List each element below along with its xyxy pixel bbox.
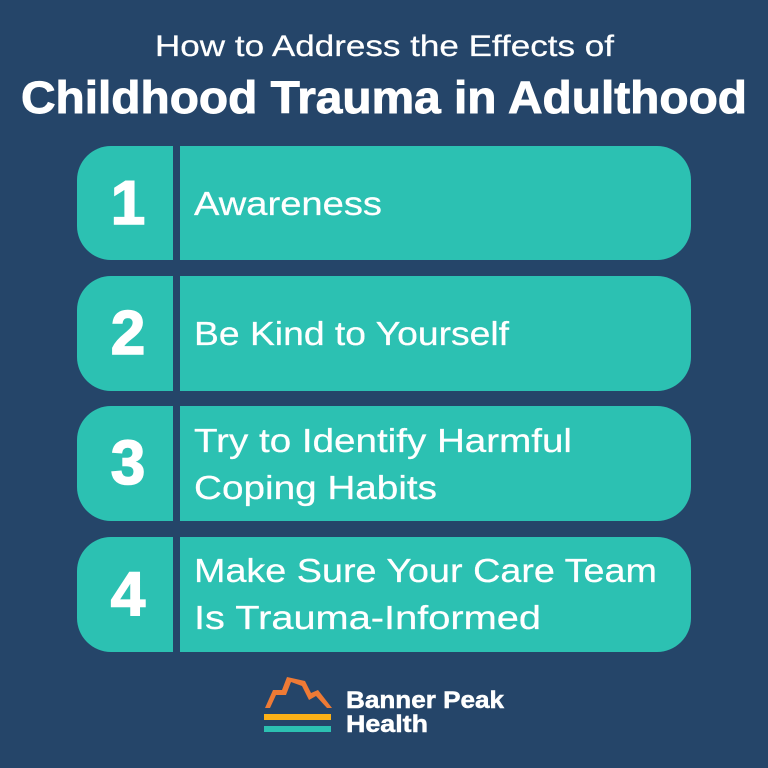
step 1 label: Awareness (194, 185, 382, 222)
step 3 number: 3 (111, 429, 145, 498)
panel: step 4 (77, 537, 691, 652)
step 4 label (194, 552, 657, 636)
logo wordmark: Health (346, 711, 428, 738)
title (21, 30, 747, 123)
step 2 number: 2 (111, 299, 145, 368)
logo wordmark (346, 687, 505, 738)
panel: step 1 (77, 146, 691, 260)
step 4 label: Make Sure Your Care Team (194, 552, 657, 589)
step 3 label: Coping Habits (194, 469, 437, 506)
step 4 number: 4 (111, 560, 146, 629)
panel: step 3 (77, 406, 691, 521)
panel: step 2 (77, 276, 691, 391)
icon: teal bar (264, 726, 331, 732)
icon: mountain peak (265, 677, 332, 708)
title line 2: Childhood Trauma in Adulthood (21, 72, 747, 123)
step 1 number: 1 (111, 169, 145, 238)
title line 1: How to Address the Effects of (155, 30, 615, 63)
step 2 label: Be Kind to Yourself (194, 315, 510, 352)
step 4 label: Is Trauma-Informed (194, 599, 541, 636)
logo wordmark: Banner Peak (346, 687, 505, 714)
step 3 label (194, 422, 572, 506)
logo (264, 677, 505, 738)
step 3 label: Try to Identify Harmful (194, 422, 572, 459)
icon: orange bar (264, 714, 331, 720)
